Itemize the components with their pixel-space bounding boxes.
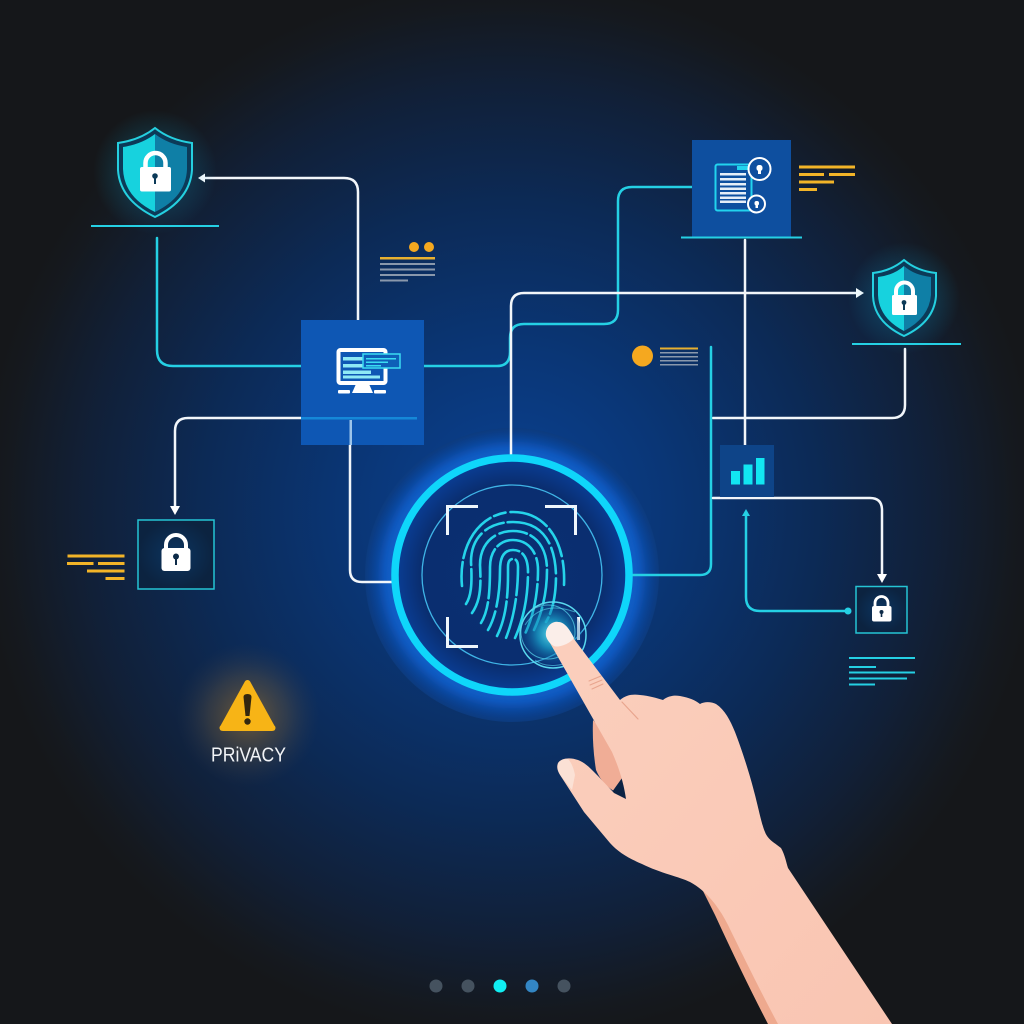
white arrow line: main panel to shield: [204, 178, 358, 320]
warning: privacy: [176, 643, 320, 787]
icon: left shield with lock: [93, 110, 217, 234]
panel: monitor: [301, 320, 424, 445]
fingerprint: [462, 512, 564, 638]
label: privacy: PRiVACY: [211, 744, 286, 766]
scanner halo: [365, 428, 659, 722]
panel: bar chart: [720, 445, 774, 497]
inner ring: [422, 485, 602, 665]
document underline: [681, 236, 802, 238]
cyan line: scanner to right column: [632, 347, 711, 575]
pagination dots: [430, 980, 570, 992]
hand shape: [546, 622, 892, 1024]
panel: left lock: [138, 520, 214, 589]
dark gap between finger and thumb: [612, 778, 627, 800]
white arrow line: main panel to left lock: [175, 418, 301, 508]
cyan double-ended line: chart to small lock: [746, 514, 846, 611]
middle finger shadow: [593, 720, 624, 792]
index fingernail: [546, 622, 574, 647]
scanner: fingerprint ring: [395, 458, 629, 692]
knuckle creases: [589, 676, 638, 719]
icon: right shield with lock: [848, 242, 960, 354]
panel: document: [681, 140, 802, 238]
scan corner brackets: [448, 506, 578, 646]
icon: warning triangle: [222, 683, 272, 728]
thumb nail: [558, 759, 575, 790]
icon: monitor: [338, 350, 400, 394]
text lines: top centre note: [380, 242, 435, 282]
outer ring: [395, 458, 629, 692]
text lines: document note: [799, 166, 855, 191]
text lines: cyan note: [849, 657, 915, 686]
touch glow: [520, 602, 586, 668]
text lines: orange dot note: [632, 346, 698, 366]
white vertical line: document panel to chart: [744, 240, 746, 445]
panel: small lock right: [856, 586, 907, 633]
right shield base line: [852, 343, 961, 345]
left shield base line: [91, 225, 219, 227]
cyan line: main panel to document panel: [424, 187, 692, 366]
white arrow line: scanner to right shield: [511, 293, 858, 455]
text lines: left note: [67, 554, 124, 580]
white line: main panel to scanner: [350, 445, 393, 582]
white arrow line: to small lock: [713, 498, 882, 577]
arrowheads: [170, 174, 887, 614]
scanner interior: [397, 460, 627, 690]
forearm shadow: [700, 885, 790, 1024]
cyan line: shield to main panel: [157, 238, 301, 366]
icon: document: [716, 158, 770, 212]
white line: right shield connection: [713, 349, 905, 418]
hand pointing: [546, 622, 892, 1024]
connector lines: [157, 178, 905, 611]
